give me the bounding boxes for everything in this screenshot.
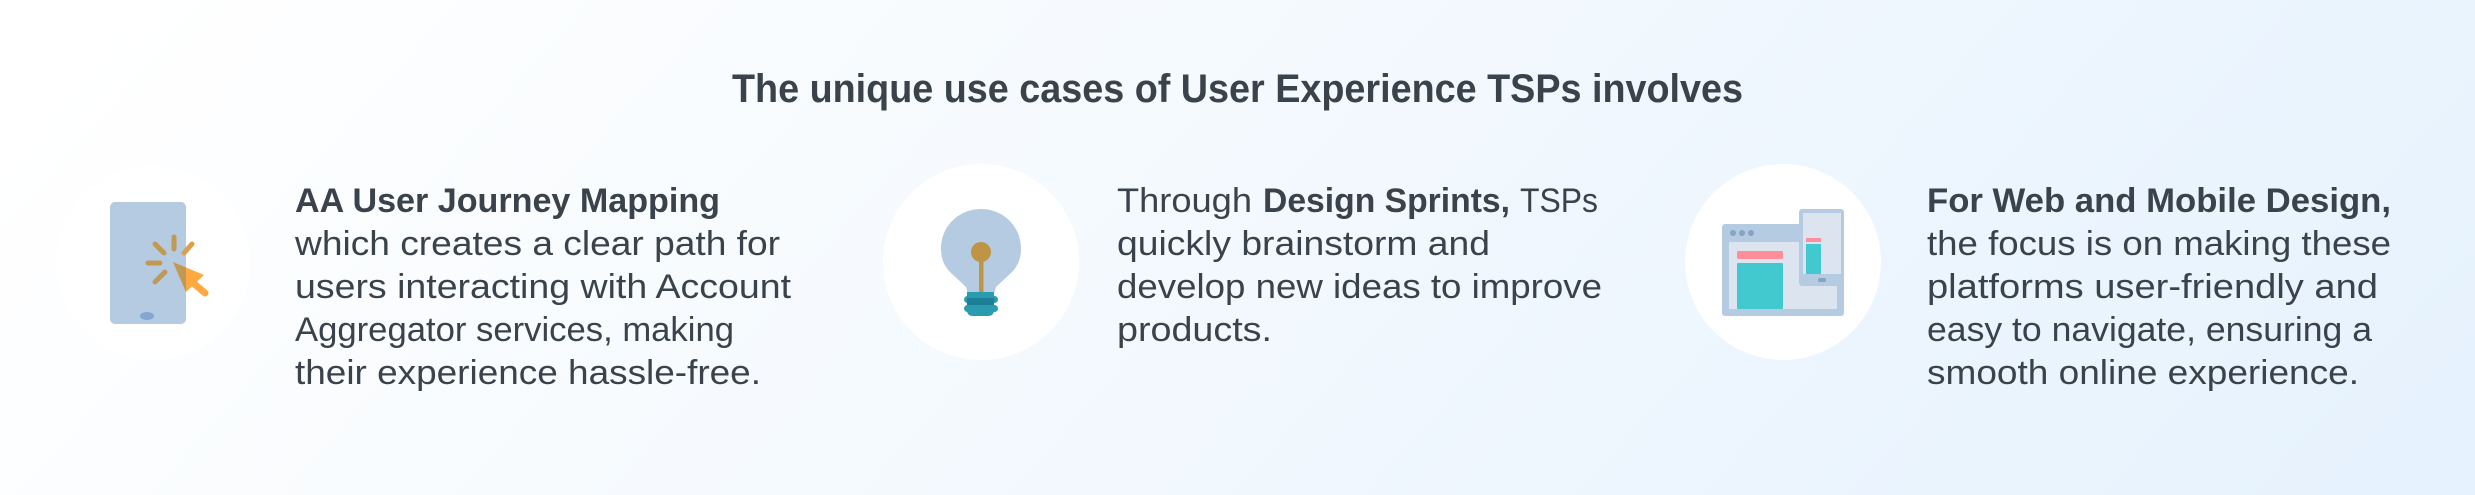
text: design sprints: Design Sprints,: [1263, 182, 1510, 220]
icon: phone with cursor click: [56, 166, 250, 360]
text: web and mobile design: smooth online experience.: [1927, 354, 2359, 392]
text: user journey mapping: users interacting with Account: [295, 268, 792, 306]
text: design sprints: develop new ideas to improve: [1117, 268, 1602, 306]
panel: design sprints: [883, 164, 1602, 360]
icon: light bulb: [883, 164, 1079, 360]
text: user journey mapping: their experience hassle-free.: [295, 354, 761, 392]
text: design sprints: TSPs: [1520, 182, 1598, 220]
icon: browser window and phone: [1685, 164, 1881, 360]
panel: user journey mapping: [56, 166, 792, 392]
text: design sprints: quickly brainstorm and: [1117, 225, 1490, 263]
text: user journey mapping: [294, 182, 792, 392]
text: web and mobile design: easy to navigate, ensuring a: [1927, 311, 2372, 349]
text: web and mobile design: [1927, 182, 2391, 392]
text: design sprints: products.: [1117, 311, 1272, 349]
panel: web and mobile design: [1685, 164, 2391, 392]
text: design sprints: [1117, 182, 1602, 349]
title: The unique use cases of User Experience TSPs involves: [732, 67, 1743, 111]
text: user journey mapping: AA User Journey Mapping: [295, 182, 720, 220]
text: web and mobile design: the focus is on making these: [1927, 225, 2391, 263]
text: user journey mapping: which creates a clear path for: [294, 225, 780, 263]
text: web and mobile design: platforms user-friendly and: [1927, 268, 2378, 306]
text: user journey mapping: Aggregator services, making: [295, 311, 734, 349]
text: web and mobile design: For Web and Mobile Design,: [1927, 182, 2391, 220]
text: design sprints: Through: [1117, 182, 1252, 220]
